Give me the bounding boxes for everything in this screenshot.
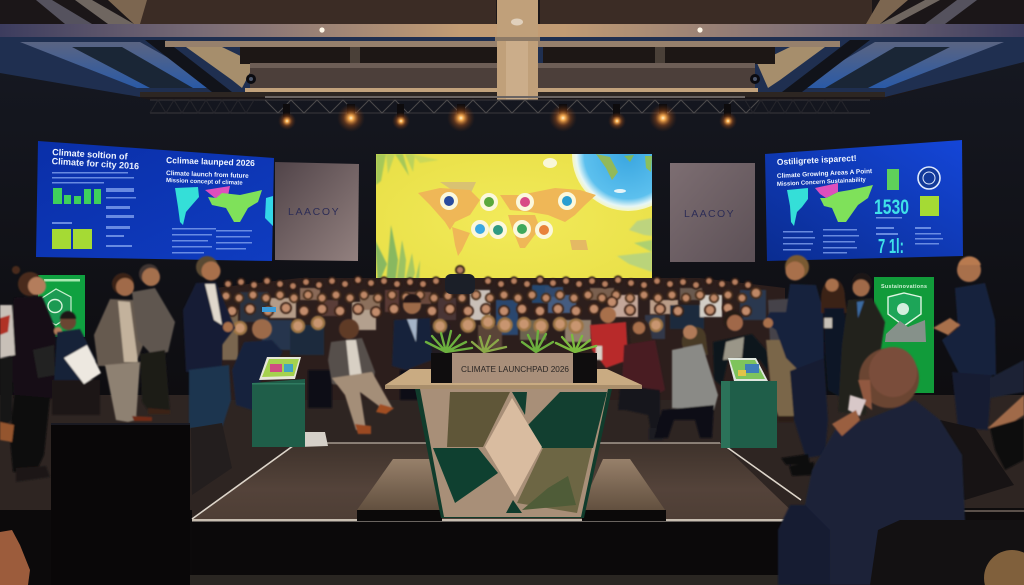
woman in grey cardigan <box>654 325 718 438</box>
seated man in dark suit <box>713 310 768 386</box>
heading: map title: Cclimae launped 2026 <box>166 155 255 168</box>
man in navy blazer standing <box>183 256 235 428</box>
planter with plants <box>426 331 597 383</box>
lower row heads <box>227 297 751 317</box>
person at left edge <box>0 305 15 442</box>
podium steps <box>357 459 666 521</box>
front row heads <box>234 316 662 334</box>
left video screen <box>36 141 274 261</box>
right banner <box>874 277 934 393</box>
small number: 7 1l: <box>878 236 904 258</box>
left pedestal with laptop <box>252 357 305 447</box>
panel: right grey sign: LAACOY <box>684 208 735 220</box>
sign text: CLIMATE LAUNCHPAD 2026 <box>461 364 569 374</box>
world map <box>787 183 873 226</box>
heading: right screen title: Climate Growing Areas A Point <box>777 168 873 180</box>
heading: map title: Climate launch from future <box>166 170 249 180</box>
big number: 1530 <box>874 196 909 219</box>
right video screen <box>765 140 963 261</box>
middle row heads <box>222 288 761 302</box>
world map <box>175 186 273 226</box>
globe <box>572 154 652 211</box>
man in navy suit standing <box>763 255 828 476</box>
left banner <box>38 275 85 337</box>
back row heads <box>224 266 752 290</box>
ceiling <box>0 0 1024 100</box>
panel: left grey sign <box>275 162 359 261</box>
icon: map markers <box>442 194 574 237</box>
panel: left grey sign: LAACOY <box>288 206 340 218</box>
text lines <box>52 172 252 254</box>
tropical leaves <box>375 154 652 285</box>
heading: left screen title: Climate for city 2016 <box>51 156 139 171</box>
heading: right screen title <box>777 153 873 188</box>
foreground seated man from behind <box>778 347 965 585</box>
khaki man behind standing man <box>766 298 802 422</box>
floor sneakers <box>299 432 328 447</box>
man in tan blazer <box>94 273 152 422</box>
man in navy suit, seated centre <box>392 294 432 370</box>
seated bald man <box>232 319 283 412</box>
heading: map title: Mission concept of climate <box>166 178 243 187</box>
right side seated audience <box>988 360 1024 470</box>
woman in dark dress <box>821 278 848 398</box>
geometric panels <box>433 392 607 513</box>
seated man in grey jacket <box>328 319 394 434</box>
heading: right screen title: Mission Concern Sustainability <box>777 177 867 188</box>
standing man on right <box>933 256 996 430</box>
laptop <box>259 357 301 380</box>
crowd heads <box>222 266 761 334</box>
crowd clothing <box>222 285 766 408</box>
large foreground speaker box <box>51 423 190 585</box>
lighting truss <box>150 97 870 113</box>
icon: ceiling spot lights <box>246 18 760 84</box>
map continents <box>418 182 596 256</box>
woman in patterned blazer <box>618 319 665 440</box>
table top <box>385 369 642 385</box>
man in grey blazer <box>132 264 175 414</box>
heading: left screen title <box>51 147 140 171</box>
seated man with paper <box>52 311 101 415</box>
stage monitor speakers <box>191 420 1014 500</box>
tablet <box>728 358 768 381</box>
foreground head bottom-right <box>984 550 1024 585</box>
back wall <box>0 0 1024 420</box>
right banner: Sustainovations <box>881 284 927 290</box>
text lines <box>783 217 943 254</box>
stage spotlights <box>278 104 737 132</box>
crowd <box>215 266 785 408</box>
heading: left screen title: Climate soltion of <box>52 147 129 162</box>
woman in black blazer <box>10 266 62 482</box>
heading: map title <box>166 155 255 187</box>
green card with seal <box>887 167 940 216</box>
bar chart <box>53 188 101 204</box>
green stat cards <box>52 229 92 249</box>
central yellow screen <box>376 154 652 278</box>
foreground hand bottom-left <box>0 530 30 585</box>
right pedestal with tablet <box>721 358 777 448</box>
man in red shirt <box>590 307 628 368</box>
people on stage <box>0 255 1024 482</box>
panel: right grey sign <box>670 163 755 262</box>
heading: right screen title: Ostiligrete isparect! <box>777 153 857 167</box>
foreground chair <box>870 520 1024 585</box>
floor <box>0 395 1024 585</box>
man in dark suit with tie <box>838 273 885 415</box>
podium with geometric front <box>385 369 642 518</box>
stage platform <box>192 443 801 575</box>
